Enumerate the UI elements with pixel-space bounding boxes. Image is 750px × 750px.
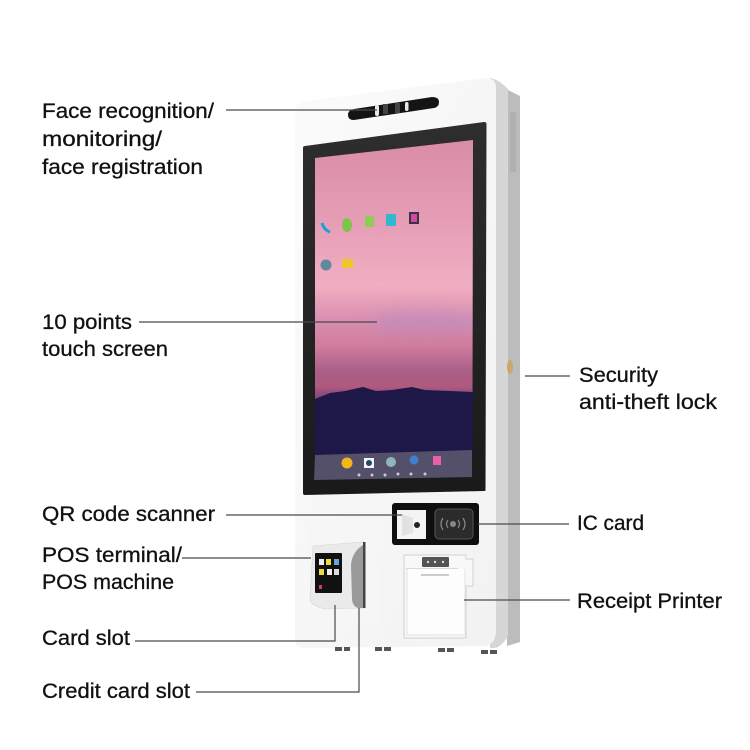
- kiosk side panel: [490, 78, 520, 648]
- NFC reader: [435, 509, 473, 539]
- scanner and NFC module: [392, 503, 479, 545]
- label: security lock: [525, 364, 718, 414]
- label: credit card slot: Credit card slot: [42, 680, 190, 703]
- dock icons: [342, 456, 441, 476]
- touch screen: [303, 122, 486, 495]
- label: credit card slot: [42, 608, 359, 703]
- receipt printer: [404, 555, 473, 638]
- mounting feet: [335, 647, 497, 654]
- POS terminal: [308, 525, 380, 625]
- label: security lock: Security: [579, 364, 659, 387]
- label: POS terminal: POS machine: [42, 571, 174, 594]
- label: QR code scanner: QR code scanner: [42, 503, 215, 526]
- card reader grip: [351, 545, 364, 608]
- dock bar: [314, 450, 472, 480]
- kiosk front panel: [295, 78, 496, 648]
- wallpaper sky: [315, 140, 473, 405]
- screen bezel: [303, 122, 486, 495]
- label: face recognition: [42, 100, 377, 179]
- label: touch screen: [42, 311, 377, 361]
- label: touch screen: 10 points: [42, 311, 132, 334]
- wallpaper cloud band: [370, 312, 480, 332]
- label: IC card: IC card: [577, 512, 644, 535]
- label: touch screen: touch screen: [42, 338, 168, 361]
- QR scanner: [397, 510, 426, 539]
- security lock: [507, 360, 513, 374]
- label: receipt printer: Receipt Printer: [577, 590, 722, 613]
- label: POS terminal: [42, 544, 311, 594]
- mountains: [315, 387, 473, 456]
- label: card slot: Card slot: [42, 627, 130, 650]
- POS screen: [315, 553, 342, 593]
- label: security lock: anti-theft lock: [579, 391, 718, 414]
- label: card slot: [42, 605, 335, 650]
- camera bar: [348, 97, 439, 120]
- label: face recognition: Face recognition/: [42, 100, 214, 123]
- label: face recognition: monitoring/: [42, 128, 162, 151]
- label: face recognition: face registration: [42, 156, 203, 179]
- desktop icons: [320, 212, 419, 270]
- kiosk device: [295, 78, 520, 654]
- label: POS terminal: POS terminal/: [42, 544, 182, 567]
